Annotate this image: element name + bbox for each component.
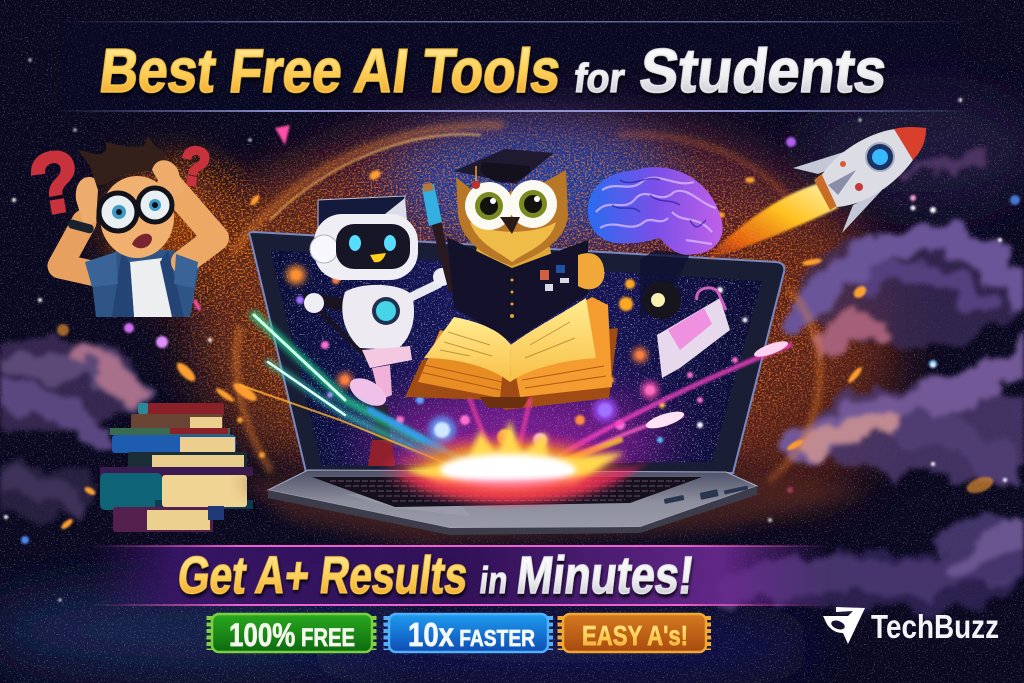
icon: question marks: ? (176, 135, 214, 199)
badge: 10x faster: 10x FASTER (408, 616, 535, 653)
book 4 (128, 452, 247, 468)
trackpad (345, 494, 470, 516)
left clouds (0, 359, 135, 398)
subtitle text: Get A+ Results (175, 547, 471, 605)
title text: Best Free AI Tools (96, 37, 564, 106)
ports (664, 486, 748, 504)
student body (60, 185, 216, 317)
subtitle text: Minutes! (514, 547, 697, 605)
bottom right cloud (735, 540, 1024, 588)
rocket body (822, 129, 913, 207)
floppy lock gadget (619, 279, 730, 378)
robot arm and stick (304, 268, 451, 360)
badge: easy a's: EASY A's! (582, 620, 688, 651)
open yellow book (405, 297, 618, 410)
confused student (23, 131, 216, 317)
rocket nozzle (814, 172, 840, 210)
icon: question marks: ? (23, 131, 89, 235)
robot head (310, 214, 418, 280)
robot back panel (318, 196, 405, 255)
owl head (456, 170, 568, 266)
laptop (240, 232, 870, 545)
book 2 (131, 414, 223, 429)
badge: 100% free: 100% FREE (229, 617, 355, 653)
robot chest light (372, 297, 400, 325)
subtitle text: in (477, 559, 510, 602)
scattered glowing stars (4, 58, 1020, 602)
laptop screen (249, 232, 784, 495)
cloud body fills (0, 232, 1024, 610)
book 3 (112, 435, 236, 453)
subtitle banner (90, 545, 830, 606)
owl eyes (465, 180, 557, 230)
green streaks (254, 315, 440, 460)
robot body (342, 285, 414, 350)
dark orb arm (619, 279, 681, 319)
badge: easy a's (560, 614, 708, 652)
book stack (100, 403, 253, 532)
graduation cap (454, 149, 554, 189)
orange swirl arcs behind characters (235, 125, 820, 480)
icon: logo mark (823, 607, 865, 644)
blue and gold rays (370, 410, 480, 470)
rocket flame (703, 182, 838, 262)
light burst and streaks (240, 315, 790, 510)
rocket window (866, 143, 894, 171)
rocket (703, 127, 926, 262)
right upper cloud (800, 240, 1022, 320)
thin book (110, 428, 230, 435)
student head (67, 136, 184, 258)
robot (304, 196, 451, 466)
logo: TechBuzz (823, 607, 999, 645)
title text: for (572, 56, 627, 101)
book 6 (113, 506, 224, 532)
nebula clouds (0, 160, 1024, 610)
book 1 (138, 403, 224, 415)
owl beak (500, 217, 520, 234)
robot ear (385, 198, 408, 232)
title text: Students (636, 37, 890, 106)
pen (422, 183, 455, 292)
owl body (470, 240, 560, 290)
logo: TechBuzz: TechBuzz (871, 608, 999, 645)
keyboard (312, 477, 702, 507)
owl with cap (447, 149, 604, 342)
robot hips and leg (345, 346, 412, 466)
dark reading book (447, 237, 604, 342)
title band (50, 21, 974, 112)
burst core (378, 420, 650, 510)
right lower cloud (800, 352, 1024, 448)
rocket fins (793, 150, 882, 233)
laptop base (268, 470, 757, 535)
laptop shadow surface (240, 476, 870, 545)
icon: question marks (23, 131, 214, 235)
brain (588, 167, 723, 320)
book 5 (100, 467, 253, 510)
pink streaks (555, 338, 790, 465)
